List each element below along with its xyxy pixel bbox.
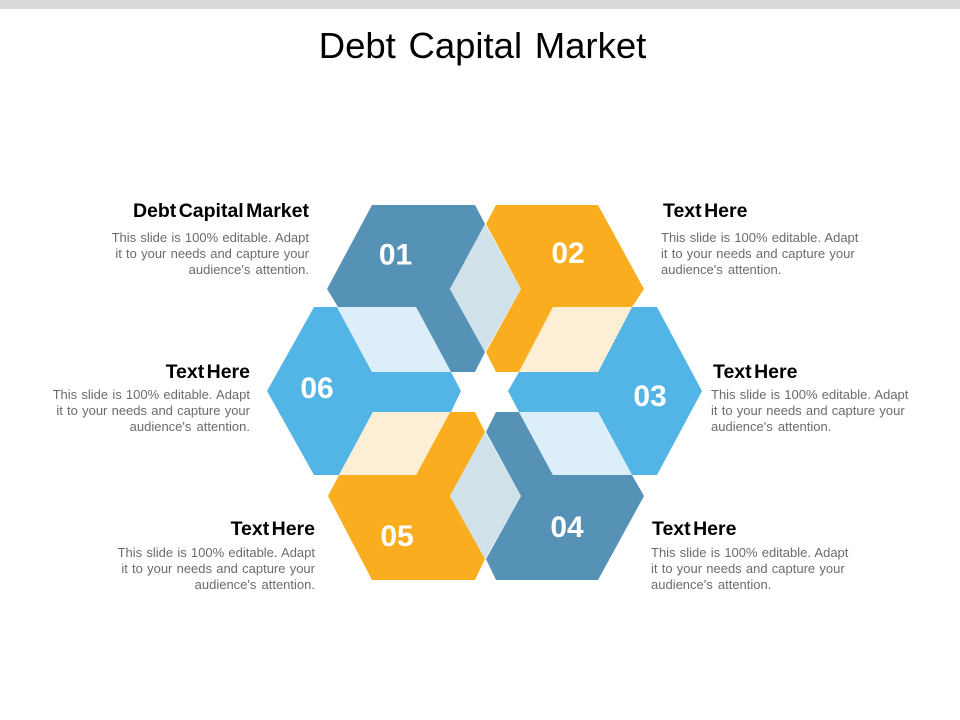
text block 02 bbox=[661, 200, 859, 277]
text block 03: it to your needs and capture your bbox=[711, 403, 905, 418]
segment 02 bbox=[486, 205, 644, 372]
segment 06: 06 bbox=[300, 372, 334, 405]
text block 05: This slide is 100% editable. Adapt bbox=[118, 545, 315, 560]
text block 02: This slide is 100% editable. Adapt bbox=[661, 230, 859, 245]
title: Debt Capital Market bbox=[319, 25, 646, 66]
text block 04 bbox=[651, 518, 849, 592]
text block 06: This slide is 100% editable. Adapt bbox=[53, 387, 250, 402]
overlap: lower left parallelogram bbox=[339, 412, 450, 475]
segment 02: 02 bbox=[551, 237, 585, 270]
text block 04: audience's attention. bbox=[651, 577, 771, 592]
segment 04: 04 bbox=[550, 511, 584, 544]
overlap: bottom diamond bbox=[450, 432, 521, 559]
text block 05: it to your needs and capture your bbox=[121, 561, 316, 576]
text block 03: This slide is 100% editable. Adapt bbox=[711, 387, 909, 402]
text block 01: Debt Capital Market bbox=[133, 200, 310, 222]
segment 05 bbox=[328, 412, 485, 580]
text block 03: Text Here bbox=[713, 361, 798, 383]
text block 06 bbox=[53, 361, 251, 434]
segment 03 bbox=[508, 307, 702, 475]
overlap: upper left parallelogram bbox=[337, 307, 451, 372]
text block 01: it to your needs and capture your bbox=[115, 246, 310, 261]
text block 05: Text Here bbox=[231, 518, 315, 540]
segment 03: 03 bbox=[633, 380, 667, 413]
segment 01 bbox=[327, 205, 485, 372]
text block 05: audience's attention. bbox=[195, 577, 315, 592]
text block 02: Text Here bbox=[663, 200, 748, 222]
text block 04: Text Here bbox=[652, 518, 737, 540]
top bar bbox=[0, 0, 960, 9]
text block 04: This slide is 100% editable. Adapt bbox=[651, 545, 849, 560]
hexagon diagram bbox=[267, 205, 702, 580]
overlap: lower right parallelogram bbox=[519, 412, 632, 475]
text block 03: audience's attention. bbox=[711, 419, 831, 434]
segment 01: 01 bbox=[379, 238, 412, 272]
overlap: upper right parallelogram bbox=[519, 307, 632, 372]
text block 02: audience's attention. bbox=[661, 262, 781, 277]
text block 04: it to your needs and capture your bbox=[651, 561, 845, 576]
text block 05 bbox=[118, 518, 316, 592]
text block 01: audience's attention. bbox=[189, 262, 309, 277]
text block 06: Text Here bbox=[166, 361, 250, 383]
text block 01: This slide is 100% editable. Adapt bbox=[112, 230, 309, 245]
text block 03 bbox=[711, 361, 909, 434]
text block 01 bbox=[112, 200, 310, 277]
segment 04 bbox=[486, 412, 644, 580]
segment 06 bbox=[267, 307, 461, 475]
overlap: top diamond bbox=[450, 224, 521, 352]
text block 06: audience's attention. bbox=[130, 419, 250, 434]
text block 02: it to your needs and capture your bbox=[661, 246, 855, 261]
text block 06: it to your needs and capture your bbox=[56, 403, 251, 418]
segment 05: 05 bbox=[380, 520, 414, 553]
